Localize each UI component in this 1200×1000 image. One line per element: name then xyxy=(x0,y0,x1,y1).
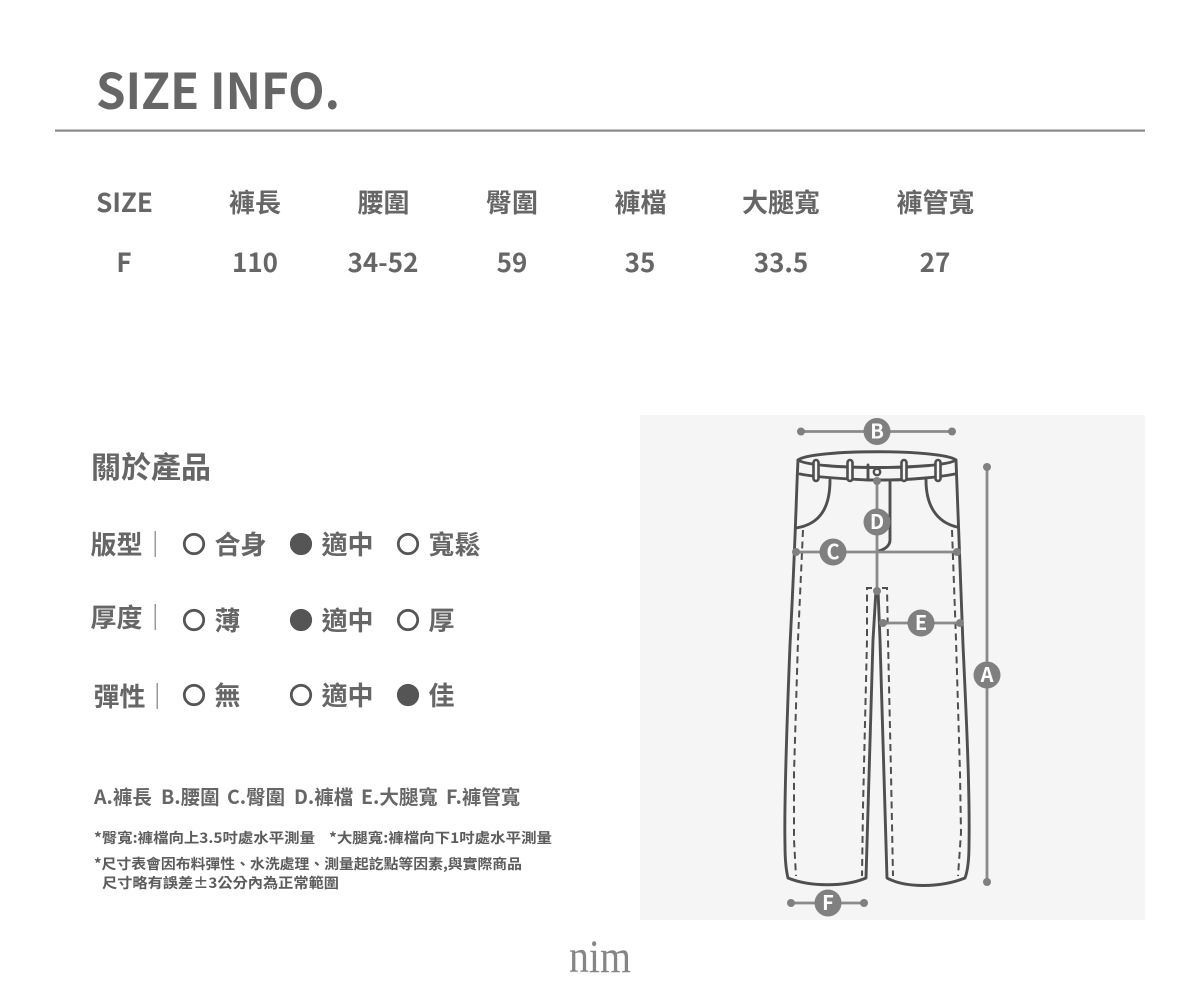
notes: *臀寬:褲檔向上3.5吋處水平測量 xyxy=(94,827,315,848)
panel: pants diagram xyxy=(640,415,1145,920)
rating row: fit xyxy=(90,525,481,562)
dimension D: rise xyxy=(864,477,890,595)
measurement legend: D.褲檔 xyxy=(294,781,353,810)
brand logo: nim xyxy=(569,931,631,983)
notes: *尺寸表會因布料彈性、水洗處理、測量起訖點等因素,與實際商品 xyxy=(94,853,522,874)
table header row: 褲長 xyxy=(229,183,281,220)
measurement legend xyxy=(93,781,520,810)
title: SIZE INFO. xyxy=(96,53,340,124)
measurement legend: A.褲長 xyxy=(93,781,152,810)
dimension F: leg opening xyxy=(787,887,868,916)
dimension E: thigh xyxy=(879,607,964,636)
dimension E: thigh: E xyxy=(915,607,927,636)
table header row: 臀圍 xyxy=(486,183,538,220)
dimension A: length xyxy=(974,463,1000,886)
rating row: elasticity: 彈性 xyxy=(94,677,146,714)
rating row: thickness: 厚度 xyxy=(90,598,143,635)
rating row: fit: 版型 xyxy=(90,525,143,562)
size table xyxy=(96,183,975,280)
dimension B: waist xyxy=(797,416,956,445)
notes: *大腿寬:褲檔向下1吋處水平測量 xyxy=(329,827,552,848)
rating row: fit: 適中 xyxy=(322,525,374,562)
table value row xyxy=(116,243,950,280)
notes xyxy=(94,827,552,893)
table header row: SIZE xyxy=(96,183,153,220)
dimension B: waist: B xyxy=(870,416,884,444)
dimension A: length: A xyxy=(980,659,994,688)
notes: 尺寸略有誤差±3公分內為正常範圍 xyxy=(102,872,339,893)
table value row: 27 xyxy=(920,243,950,280)
measurement legend: B.腰圍 xyxy=(161,781,220,810)
table header row: 腰圍 xyxy=(357,183,410,220)
measurement legend: C.臀圍 xyxy=(227,781,285,810)
table header row: 褲管寬 xyxy=(896,183,975,220)
table value row: 34-52 xyxy=(348,243,418,280)
rating row: thickness xyxy=(90,598,455,638)
dimension F: leg opening: F xyxy=(822,887,834,916)
rating row: elasticity: 無 xyxy=(214,676,241,713)
rating row: elasticity: 適中 xyxy=(322,676,374,713)
table header row: 褲檔 xyxy=(614,183,667,220)
dimension C: hip: C xyxy=(826,536,840,565)
table value row: 33.5 xyxy=(754,243,808,280)
table value row: F xyxy=(116,243,132,280)
dimension D: rise: D xyxy=(870,506,884,535)
rating row: thickness: 薄 xyxy=(214,601,241,638)
rating row: elasticity xyxy=(94,676,455,714)
dimension C: hip xyxy=(792,536,961,566)
table value row: 59 xyxy=(497,243,527,280)
rating row: thickness: 適中 xyxy=(322,601,374,638)
rating row: fit: 寬鬆 xyxy=(428,525,481,562)
table value row: 110 xyxy=(232,243,278,280)
measurement legend: E.大腿寬 xyxy=(361,781,438,810)
table header row: 大腿寬 xyxy=(742,183,820,220)
table header row xyxy=(96,183,975,220)
heading: product info: 關於產品 xyxy=(91,443,211,487)
measurement legend: F.褲管寬 xyxy=(446,781,520,810)
table value row: 35 xyxy=(625,243,655,280)
rating row: elasticity: 佳 xyxy=(428,676,455,713)
pants drawing xyxy=(785,452,969,886)
rating row: fit: 合身 xyxy=(214,525,267,562)
rating row: thickness: 厚 xyxy=(428,601,455,638)
